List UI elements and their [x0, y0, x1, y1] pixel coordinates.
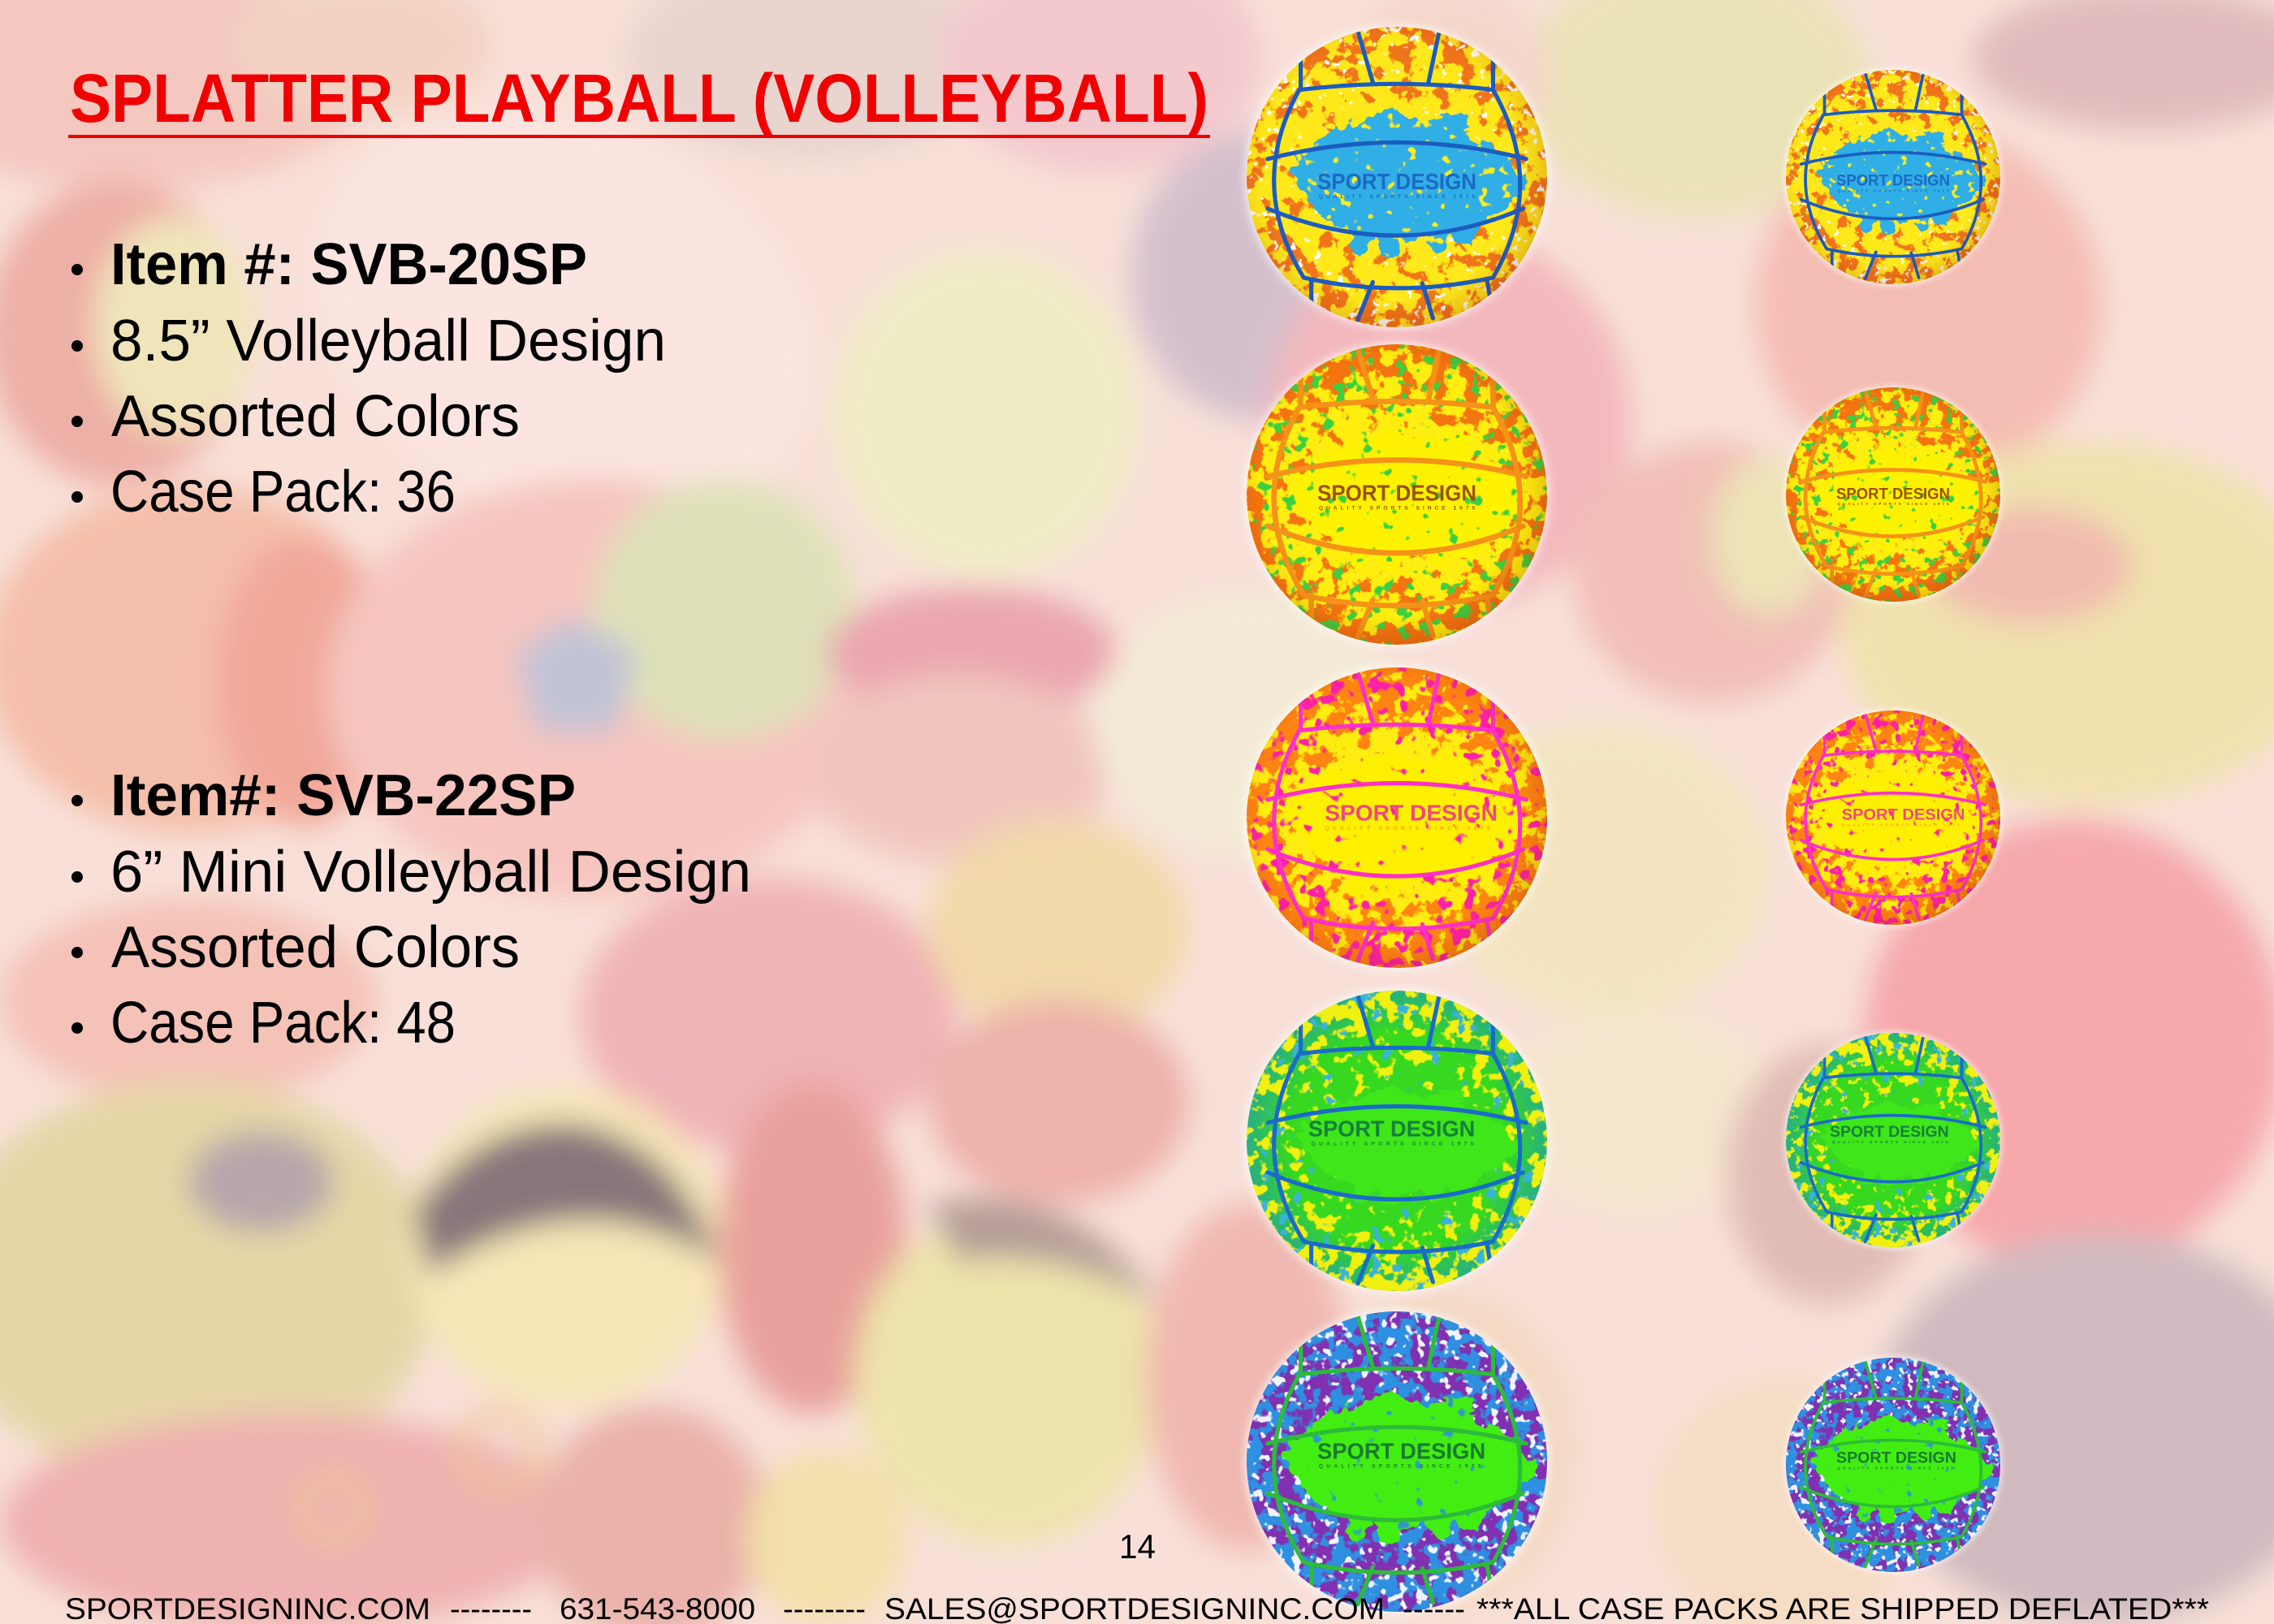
volleyball: large blue splatter: SPORT DESIGN: [1317, 169, 1476, 194]
text block: item SVB-22SP: 6” Mini Volleyball Design: [110, 840, 751, 905]
text block: item SVB-20SP: Case Pack: 36: [110, 460, 456, 525]
volleyball: small green splatter: [1785, 1032, 2001, 1248]
volleyball: large pink splatter: SPORT DESIGN: [1325, 801, 1498, 826]
text block: item SVB-22SP: Case Pack: 48: [110, 991, 456, 1056]
volleyball: large pink splatter: QUALITY SPORTS SINCE 1975: [1325, 826, 1490, 831]
text block: item SVB-22SP: Assorted Colors: [111, 915, 520, 980]
page number: 14: [1119, 1527, 1156, 1566]
volleyball: small green splatter: SPORT DESIGN: [1830, 1123, 1949, 1141]
volleyball: small purple splatter: QUALITY SPORTS SINCE 1975: [1837, 1466, 1953, 1471]
volleyball: small orange splatter: SPORT DESIGN: [1836, 485, 1950, 503]
volleyball: large blue splatter: QUALITY SPORTS SINCE 1975: [1319, 194, 1475, 200]
volleyball: large green splatter: QUALITY SPORTS SINCE 1975: [1312, 1142, 1474, 1147]
volleyball: large orange splatter: [1245, 343, 1549, 646]
volleyball: large green splatter: SPORT DESIGN: [1308, 1116, 1475, 1141]
volleyball: small purple splatter: [1785, 1357, 2001, 1573]
volleyball: large purple splatter: QUALITY SPORTS SINCE 1975: [1319, 1463, 1481, 1469]
title: SPLATTER PLAYBALL (VOLLEYBALL): [70, 60, 1208, 136]
text block: item SVB-22SP: Item#: SVB-22SP: [110, 763, 576, 828]
volleyball: small blue splatter: QUALITY SPORTS SINCE 1975: [1837, 188, 1949, 193]
volleyball: small pink splatter: SPORT DESIGN: [1842, 806, 1965, 824]
volleyball: small pink splatter: QUALITY SPORTS SINCE 1975: [1842, 823, 1960, 828]
text block: item SVB-20SP: [71, 232, 666, 525]
text block: item SVB-22SP: [71, 763, 751, 1056]
volleyball: small purple splatter: SPORT DESIGN: [1836, 1449, 1956, 1466]
volleyball: small blue splatter: [1785, 69, 2001, 285]
volleyball: large orange splatter: QUALITY SPORTS SINCE 1975: [1319, 505, 1475, 511]
volleyball: small orange splatter: [1785, 387, 2001, 603]
volleyball: large purple splatter: [1245, 1310, 1549, 1613]
footer contact line: [65, 1592, 2209, 1624]
volleyball: large purple splatter: SPORT DESIGN: [1317, 1438, 1485, 1463]
volleyball: large pink splatter: [1245, 666, 1549, 970]
volleyball: small orange splatter: QUALITY SPORTS SINCE 1975: [1837, 502, 1949, 507]
text block: item SVB-20SP: Item #: SVB-20SP: [110, 232, 587, 297]
volleyball: small pink splatter: [1785, 710, 2001, 926]
volleyball: small blue splatter: SPORT DESIGN: [1836, 172, 1950, 190]
volleyball: large orange splatter: SPORT DESIGN: [1317, 480, 1476, 505]
volleyball: small green splatter: QUALITY SPORTS SINCE 1975: [1832, 1140, 1948, 1145]
volleyball: large blue splatter: [1245, 25, 1549, 329]
volleyball: large green splatter: [1245, 989, 1549, 1293]
text block: item SVB-20SP: Assorted Colors: [111, 384, 520, 449]
text block: item SVB-20SP: 8.5” Volleyball Design: [110, 309, 666, 374]
